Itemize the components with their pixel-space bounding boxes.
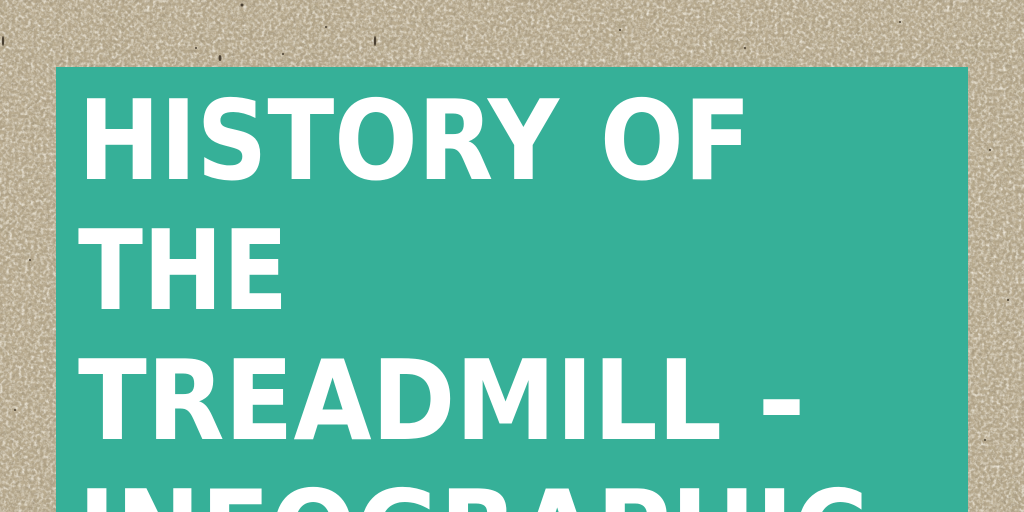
title: HISTORY <box>78 77 560 206</box>
title: THE <box>78 207 288 336</box>
title: TREADMILL <box>78 337 722 466</box>
title: OF <box>600 77 751 206</box>
panel: title card <box>56 67 968 512</box>
title <box>78 77 868 512</box>
title: - <box>757 337 806 466</box>
